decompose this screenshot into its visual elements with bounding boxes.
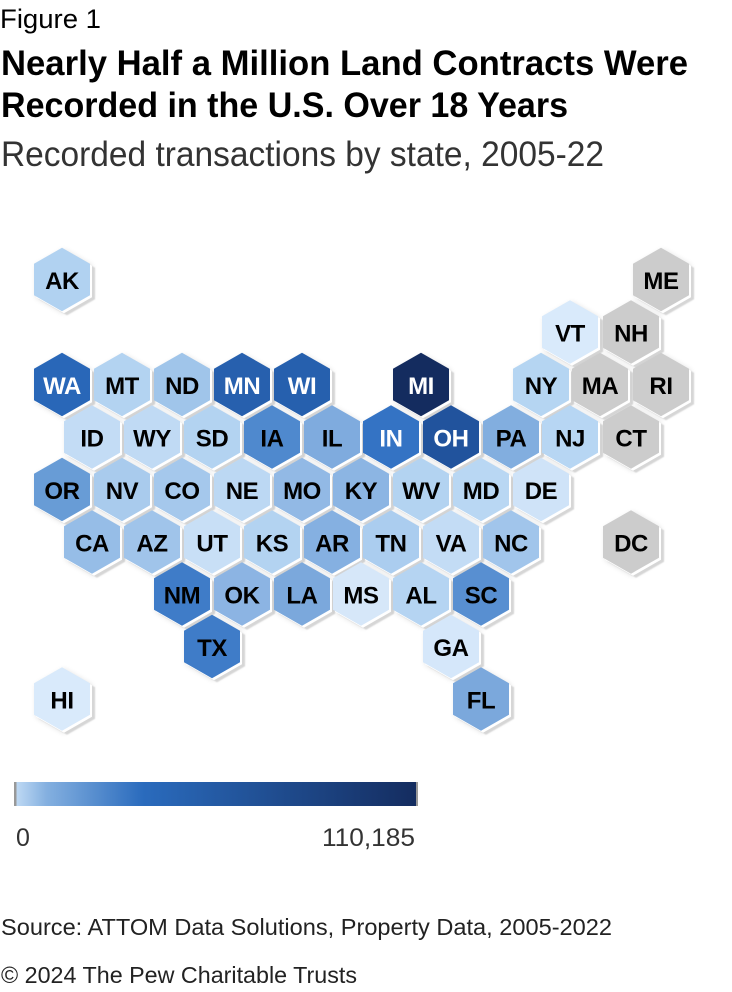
hex: NJ: NJ	[555, 426, 585, 452]
hex: KS	[244, 510, 305, 578]
hex: MD: MD	[463, 478, 499, 505]
hex: DE	[513, 458, 574, 525]
hex: TN	[363, 510, 424, 578]
hex: SC: SC	[465, 582, 497, 610]
hex: WV	[393, 458, 454, 525]
hex: VT: VT	[555, 320, 586, 348]
legend min label: 0	[16, 824, 30, 852]
hex: OK	[214, 562, 275, 630]
hex: NE	[214, 458, 275, 525]
hex: NV: NV	[106, 478, 139, 505]
hex: TX	[184, 615, 245, 682]
hex: IN: IN	[379, 426, 403, 452]
hex: CT	[603, 405, 664, 473]
hex: HI	[34, 667, 95, 735]
hex: VA	[423, 510, 484, 578]
hex: MN: MN	[224, 373, 260, 400]
hex: IL: IL	[322, 426, 342, 452]
hex: MA: MA	[582, 373, 618, 400]
hex: ND: ND	[165, 373, 199, 400]
hex: RI: RI	[649, 373, 673, 400]
hex: UT: UT	[196, 530, 228, 558]
hex: KY: KY	[345, 478, 378, 505]
hex: CO	[154, 458, 215, 525]
hex: PA	[483, 405, 544, 473]
hex: CA	[64, 510, 125, 578]
legend	[14, 782, 418, 852]
hex: MI	[393, 353, 454, 420]
hex: LA	[274, 562, 335, 630]
hex: NH: NH	[614, 320, 648, 348]
hex: OR: OR	[44, 478, 80, 505]
hex: NJ	[542, 405, 603, 473]
hex: MS	[333, 562, 394, 630]
hex: MA	[572, 353, 633, 420]
hex: IA	[244, 405, 305, 473]
figure label: Figure 1	[0, 4, 101, 34]
hex: AL: AL	[405, 582, 437, 610]
hex: NC	[483, 510, 544, 578]
hex: DC	[603, 510, 664, 578]
hex: ID: ID	[80, 426, 104, 452]
hex: ME: ME	[643, 268, 679, 295]
hex: WY: WY	[133, 426, 171, 452]
hex: MN	[214, 353, 275, 420]
hex: VT	[542, 300, 603, 368]
hex: NE: NE	[226, 478, 259, 505]
hex: MS: MS	[343, 582, 379, 610]
hex: IL	[304, 405, 365, 473]
hex: AK: AK	[45, 268, 80, 295]
hex: UT	[184, 510, 245, 578]
hex: MT	[94, 353, 155, 420]
hex: WA	[34, 353, 95, 420]
hex: NH	[603, 300, 664, 368]
hex: PA: PA	[496, 426, 526, 452]
hex: NC: NC	[494, 530, 528, 558]
hex: RI	[633, 353, 694, 420]
hex: IA: IA	[260, 426, 284, 452]
hex: NY	[513, 353, 574, 420]
hex: ND	[154, 353, 215, 420]
hex: DE: DE	[525, 478, 558, 505]
source: Source: ATTOM Data Solutions, Property Data, 2005-2022	[1, 914, 612, 940]
hex: ID	[64, 405, 125, 473]
hex: MO: MO	[283, 478, 321, 505]
hex: SC	[453, 562, 514, 630]
hex: GA	[423, 615, 484, 682]
hex: OH	[423, 405, 484, 473]
title: Recorded in the U.S. Over 18 Years	[1, 86, 568, 125]
hex: DC: DC	[614, 530, 648, 558]
hex: MT: MT	[105, 373, 140, 400]
hex: IN	[363, 405, 424, 473]
hex: SD	[184, 405, 245, 473]
title: Nearly Half a Million Land Contracts Were	[1, 44, 688, 83]
hex: TX: TX	[197, 635, 227, 662]
title	[1, 44, 688, 125]
hex: LA: LA	[286, 582, 318, 610]
subtitle: Recorded transactions by state, 2005-22	[1, 135, 604, 174]
hex: VA: VA	[436, 530, 466, 558]
hex: AR	[304, 510, 365, 578]
hex: WY	[124, 405, 185, 473]
hex: GA: GA	[433, 635, 469, 662]
hex: AZ	[124, 510, 185, 578]
hex: AZ: AZ	[136, 530, 168, 558]
hex: WV: WV	[402, 478, 440, 505]
hex: WA: WA	[43, 373, 81, 400]
hex: OH: OH	[433, 426, 469, 452]
hex: WI	[274, 353, 335, 420]
hex: ME	[633, 248, 694, 315]
hex: MI: MI	[408, 373, 434, 400]
hexagon map	[34, 248, 694, 735]
hex: OK: OK	[224, 582, 261, 610]
hex: OR	[34, 458, 95, 525]
hex: KY	[333, 458, 394, 525]
hex: TN: TN	[375, 530, 407, 558]
hex: NV	[94, 458, 155, 525]
hex: WI: WI	[288, 373, 316, 400]
hex: AR: AR	[315, 530, 349, 558]
hex: NM	[154, 562, 215, 630]
hex: FL: FL	[467, 688, 495, 714]
hex: CA: CA	[75, 530, 109, 558]
copyright: © 2024 The Pew Charitable Trusts	[1, 962, 357, 988]
legend max label: 110,185	[322, 824, 415, 852]
hex: NM: NM	[164, 582, 200, 610]
hex: AK	[34, 248, 95, 315]
hex: FL	[453, 667, 514, 735]
hex: AL	[393, 562, 454, 630]
hex: HI: HI	[50, 688, 74, 714]
hex: NY: NY	[525, 373, 558, 400]
hex: SD: SD	[196, 426, 228, 452]
hex: CO: CO	[164, 478, 200, 505]
hex: KS: KS	[256, 530, 289, 558]
legend gradient bar	[14, 782, 418, 806]
hex: MO	[274, 458, 335, 525]
hex: CT: CT	[615, 426, 647, 452]
hex: MD	[453, 458, 514, 525]
